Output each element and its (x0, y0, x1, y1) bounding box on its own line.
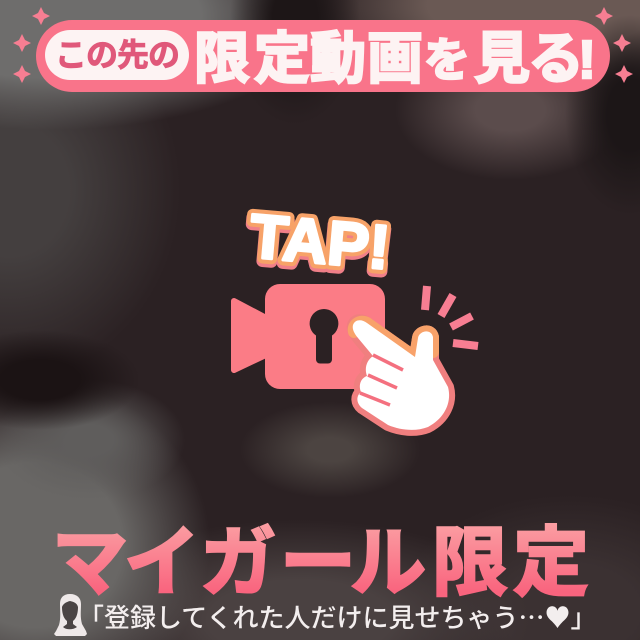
icon: tapping hand (347, 286, 478, 436)
icon: keyhole (310, 309, 338, 364)
banner heading: 画 (367, 27, 423, 90)
banner heading (194, 27, 596, 90)
banner heading: 限 (194, 27, 250, 90)
subtitle quote: 「登録してくれた人だけに見せちゃう…♥」 (78, 599, 596, 635)
banner heading: ! (578, 30, 596, 90)
banner heading: を (424, 34, 470, 86)
banner heading: る (528, 27, 584, 90)
main heading: マイガール限定 (52, 521, 589, 600)
banner heading: 定 (254, 27, 310, 90)
tap motion lines (425, 286, 478, 346)
icon: locked video camera (231, 284, 385, 389)
banner heading: 動 (310, 27, 366, 90)
banner pill: この先の (45, 30, 189, 80)
top banner (36, 20, 610, 92)
banner pill: この先の: この先の (55, 37, 179, 73)
sparkles around banner (13, 7, 633, 83)
icon: woman silhouette (54, 594, 87, 636)
finger creases (360, 355, 403, 405)
banner heading: 見 (474, 27, 530, 90)
